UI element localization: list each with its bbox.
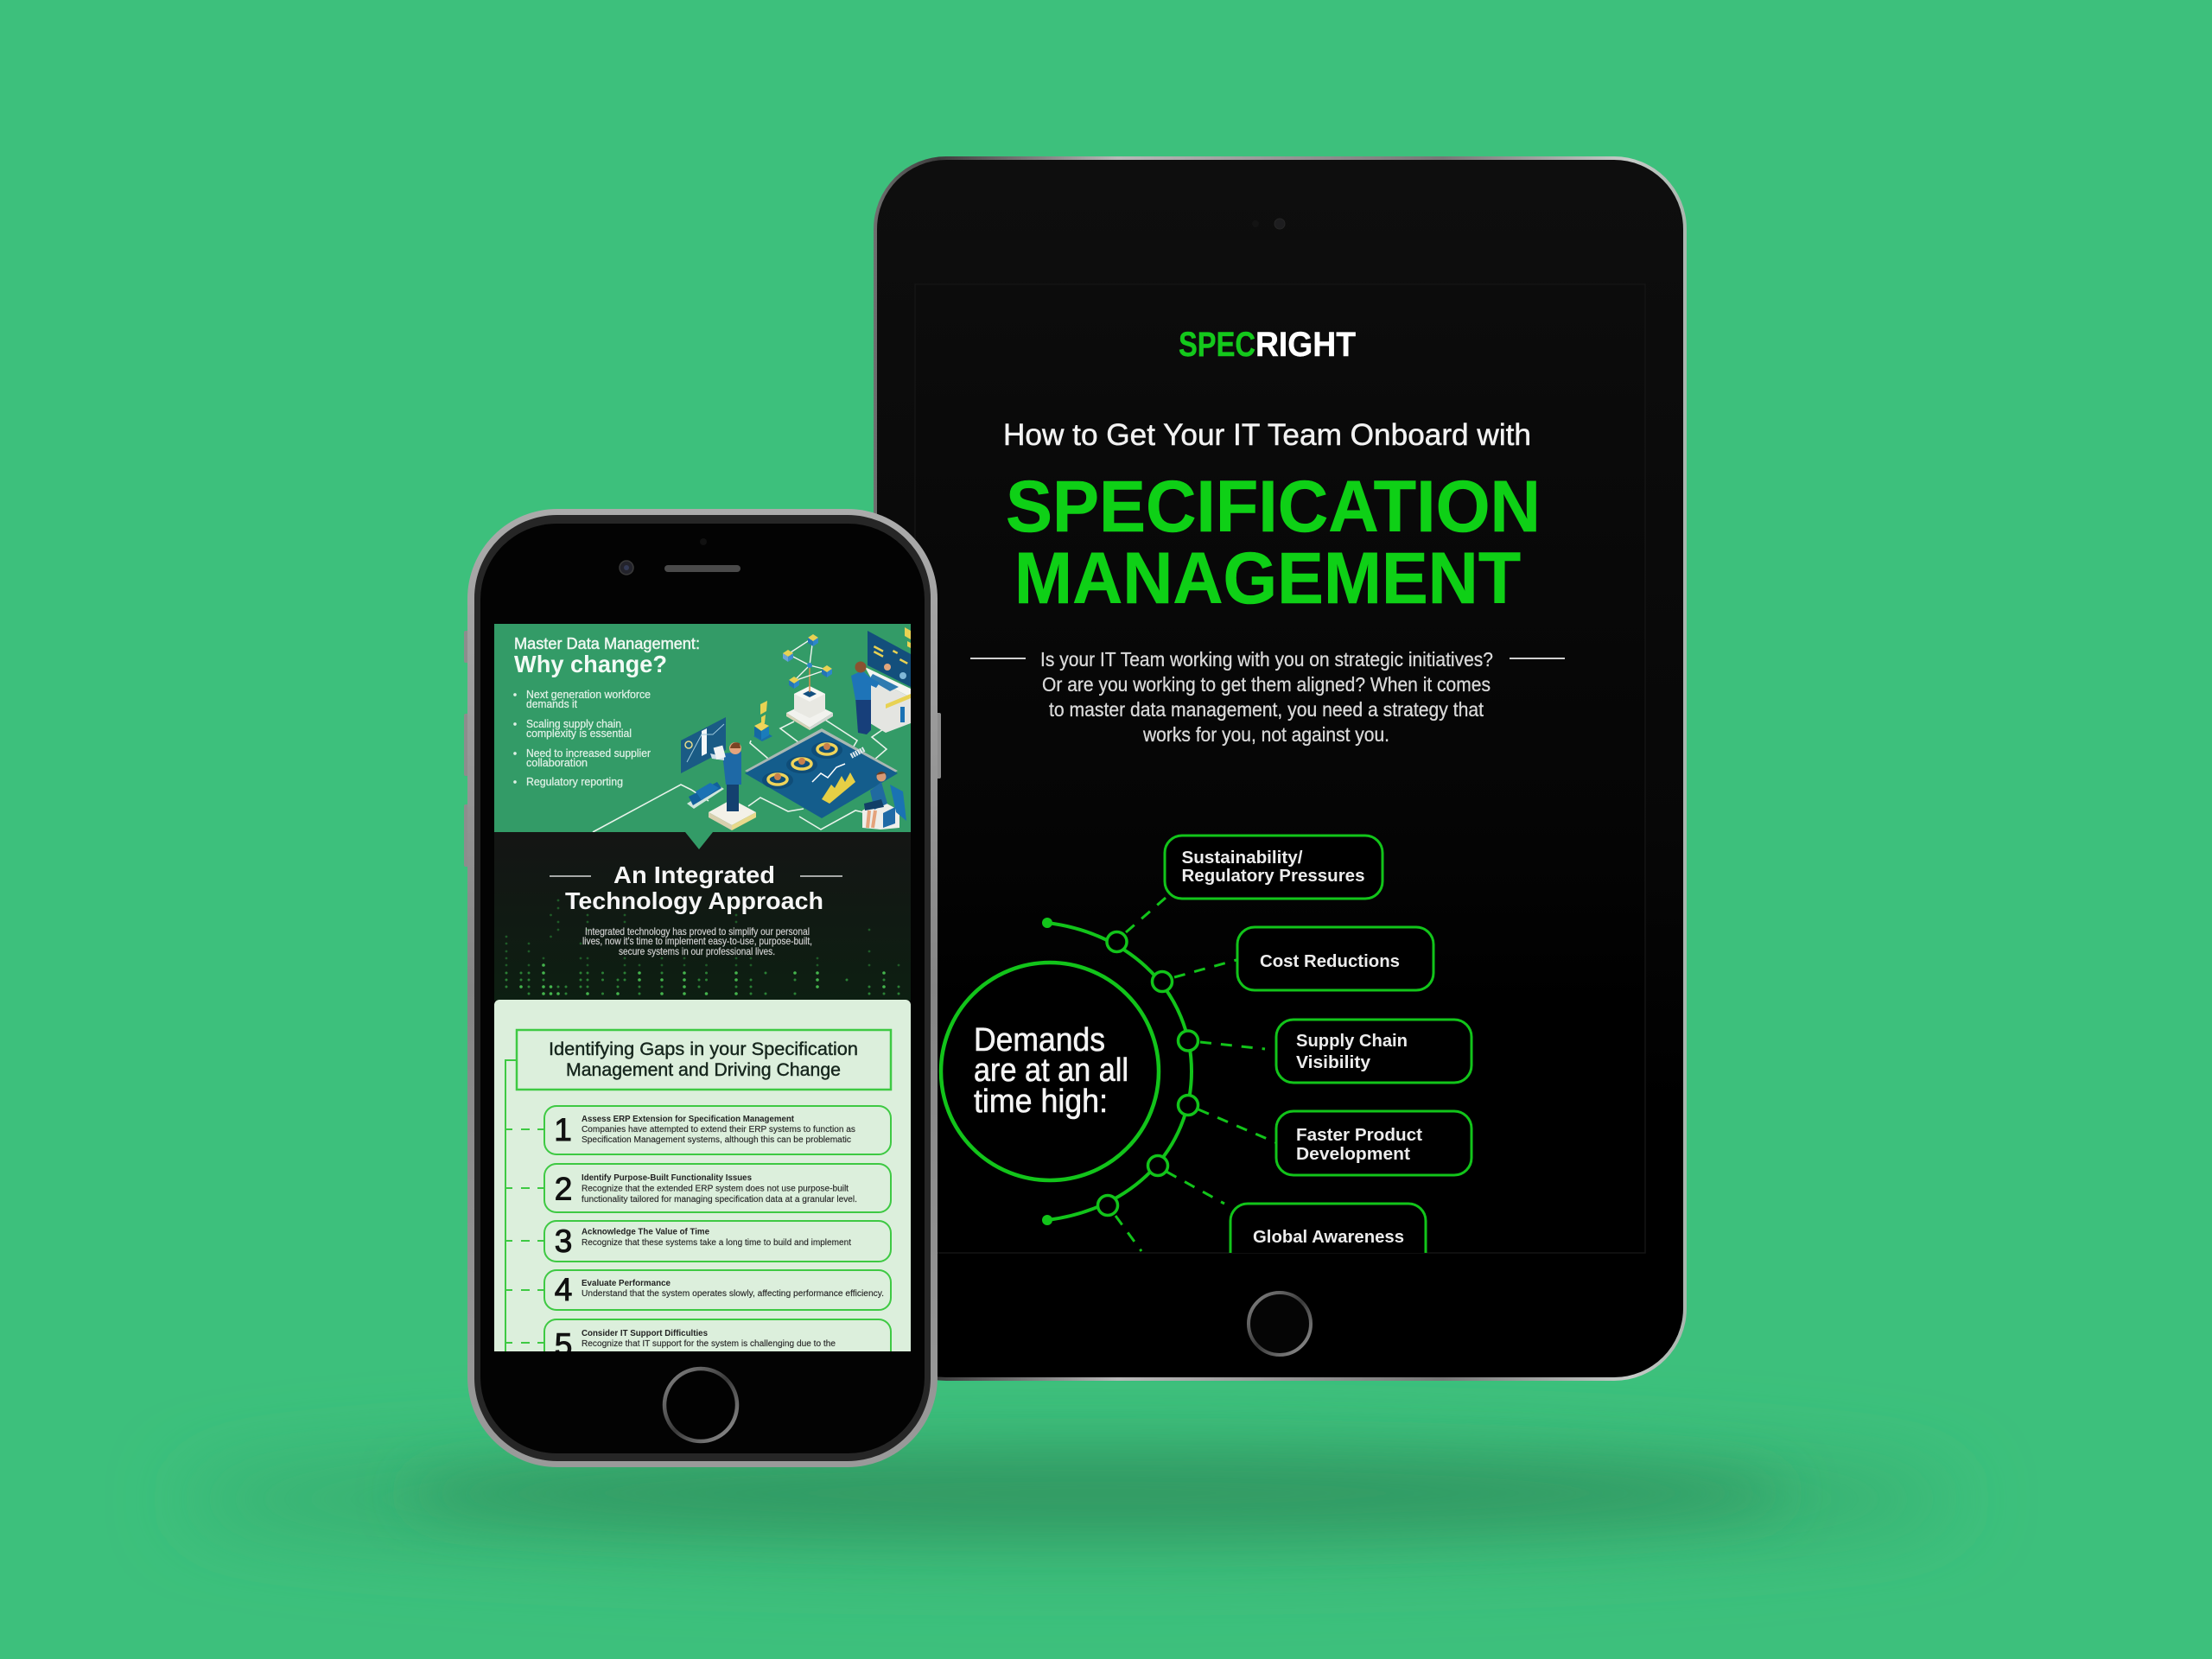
box: sustainability (1165, 836, 1382, 899)
step 1 (505, 1106, 891, 1154)
box: cost reductions (1237, 927, 1433, 990)
phone device (464, 509, 941, 1467)
box: supply chain (1276, 1020, 1471, 1083)
logo: SPEC (1179, 326, 1255, 364)
box: global awareness: Global Awareness (1253, 1228, 1404, 1247)
desk with man (851, 662, 911, 734)
bar blocks (687, 782, 724, 809)
illustration (593, 627, 911, 832)
bullet list: Need to increased supplier (526, 747, 651, 760)
heading: integrated approach: Technology Approach (565, 887, 823, 914)
step 2: functionality tailored for managing specification data at a granular level. (582, 1195, 857, 1205)
central circle (941, 963, 1159, 1180)
box: sustainability: Sustainability/ (1182, 849, 1303, 868)
box: cost reductions: Cost Reductions (1260, 952, 1400, 971)
box: faster product: Development (1296, 1145, 1410, 1164)
phone camera (620, 538, 707, 575)
box: supply chain: Supply Chain (1296, 1032, 1408, 1051)
tablet body (877, 160, 1683, 1377)
bullet list: complexity is essential (526, 728, 632, 740)
right wall panel (868, 627, 911, 687)
bullet list: Next generation workforce (526, 689, 651, 701)
step 4: Understand that the system operates slowly, affecting performance efficiency. (582, 1289, 884, 1299)
ground shadow (181, 1443, 1961, 1555)
integrated paragraph: lives, now it's time to implement easy-to-use, purpose-built, (582, 935, 812, 947)
integrated paragraph (582, 925, 812, 957)
central circle: are at an all (974, 1052, 1128, 1089)
bullet list: Scaling supply chain (526, 718, 621, 730)
step 1: Specification Management systems, although this can be problematic (582, 1135, 851, 1145)
tablet device (874, 156, 1687, 1381)
heading: integrated approach (550, 861, 842, 914)
pedestal with network (783, 634, 833, 730)
bullet list: demands it (526, 698, 577, 710)
box: sustainability: Regulatory Pressures (1182, 867, 1365, 886)
section: why change (494, 624, 911, 832)
tablet camera (1252, 219, 1285, 229)
arc (1047, 923, 1192, 1220)
section: integrated technology (494, 832, 911, 1001)
phone bezel (474, 515, 931, 1461)
intro paragraph: to master data management, you need a strategy that (1049, 698, 1484, 721)
yellow cube stack (753, 701, 772, 741)
box: supply chain: Visibility (1296, 1053, 1371, 1072)
step 3: Acknowledge The Value of Time (582, 1227, 709, 1237)
step 5: 5 (555, 1327, 572, 1363)
box: global awareness (1229, 1203, 1427, 1253)
bullet list: collaboration (526, 757, 588, 769)
step 5: Recognize that IT support for the system is challenging due to the (582, 1339, 836, 1349)
dashed connectors (1116, 898, 1275, 1251)
standing man on pedestal (709, 742, 756, 830)
notch arrow (685, 832, 713, 849)
phone speaker (664, 565, 741, 572)
phone frame (467, 509, 938, 1467)
text: why change: Why change? (514, 651, 667, 677)
heading box: Management and Driving Change (566, 1060, 841, 1080)
subtitle: How to Get Your IT Team Onboard with (1003, 418, 1531, 452)
step 2 (505, 1164, 891, 1212)
phone body (480, 524, 925, 1453)
step 1: Companies have attempted to extend their ERP systems to function as (582, 1125, 855, 1135)
intro paragraph: Is your IT Team working with you on strategic initiatives? (1040, 648, 1493, 671)
step 3 (505, 1221, 891, 1262)
circuit lines (593, 720, 887, 832)
box: faster product: Faster Product (1296, 1126, 1422, 1145)
seated woman (862, 772, 906, 830)
logo (1179, 326, 1356, 364)
matrix dots (506, 900, 899, 994)
heading: integrated approach: An Integrated (613, 861, 775, 888)
main title: MANAGEMENT (1014, 537, 1521, 619)
heading box (517, 1030, 891, 1090)
main title: SPECIFICATION (1006, 466, 1541, 547)
tablet home button (1249, 1293, 1311, 1355)
section: identifying gaps (494, 1000, 911, 1371)
step 5: Consider IT Support Difficulties (582, 1329, 708, 1338)
tablet screen (915, 284, 1645, 1281)
data platform (745, 728, 898, 818)
logo: RIGHT (1255, 326, 1356, 364)
step 4 (505, 1270, 891, 1310)
connector trunk (505, 1060, 517, 1351)
demands diagram (941, 836, 1471, 1281)
central circle: time high: (974, 1084, 1108, 1120)
intro paragraph (970, 648, 1565, 746)
phone home button (664, 1369, 737, 1441)
step 1: 1 (554, 1112, 572, 1147)
bullet list (513, 689, 651, 788)
device mockup scene (258, 156, 1885, 1573)
step 2: Recognize that the extended ERP system does not use purpose-built (582, 1184, 849, 1194)
intro paragraph: works for you, not against you. (1142, 723, 1389, 746)
phone screen (494, 624, 911, 1371)
side buttons (464, 631, 941, 867)
step 3: 3 (555, 1224, 572, 1259)
integrated paragraph: Integrated technology has proved to simplify our personal (585, 925, 810, 938)
box: faster product (1276, 1111, 1471, 1175)
main title (1006, 466, 1541, 619)
intro paragraph: Or are you working to get them aligned? When it comes (1042, 673, 1491, 696)
step 4: Evaluate Performance (582, 1279, 671, 1288)
text: master data management: Master Data Management: (514, 635, 700, 652)
step 5 (505, 1319, 891, 1371)
step 2: 2 (555, 1172, 572, 1206)
arc nodes (1097, 931, 1198, 1215)
step 1: Assess ERP Extension for Specification Management (582, 1115, 795, 1124)
bullet list: Regulatory reporting (526, 776, 623, 788)
step 3: Recognize that these systems take a long time to build and implement (582, 1238, 851, 1248)
step 2: Identify Purpose-Built Functionality Issues (582, 1173, 752, 1183)
step 4: 4 (555, 1272, 572, 1307)
heading box: Identifying Gaps in your Specification (549, 1039, 858, 1059)
tablet frame (874, 156, 1687, 1381)
central circle: Demands (974, 1022, 1105, 1058)
integrated paragraph: secure systems in our professional lives. (619, 945, 775, 957)
wall chart (681, 717, 726, 773)
